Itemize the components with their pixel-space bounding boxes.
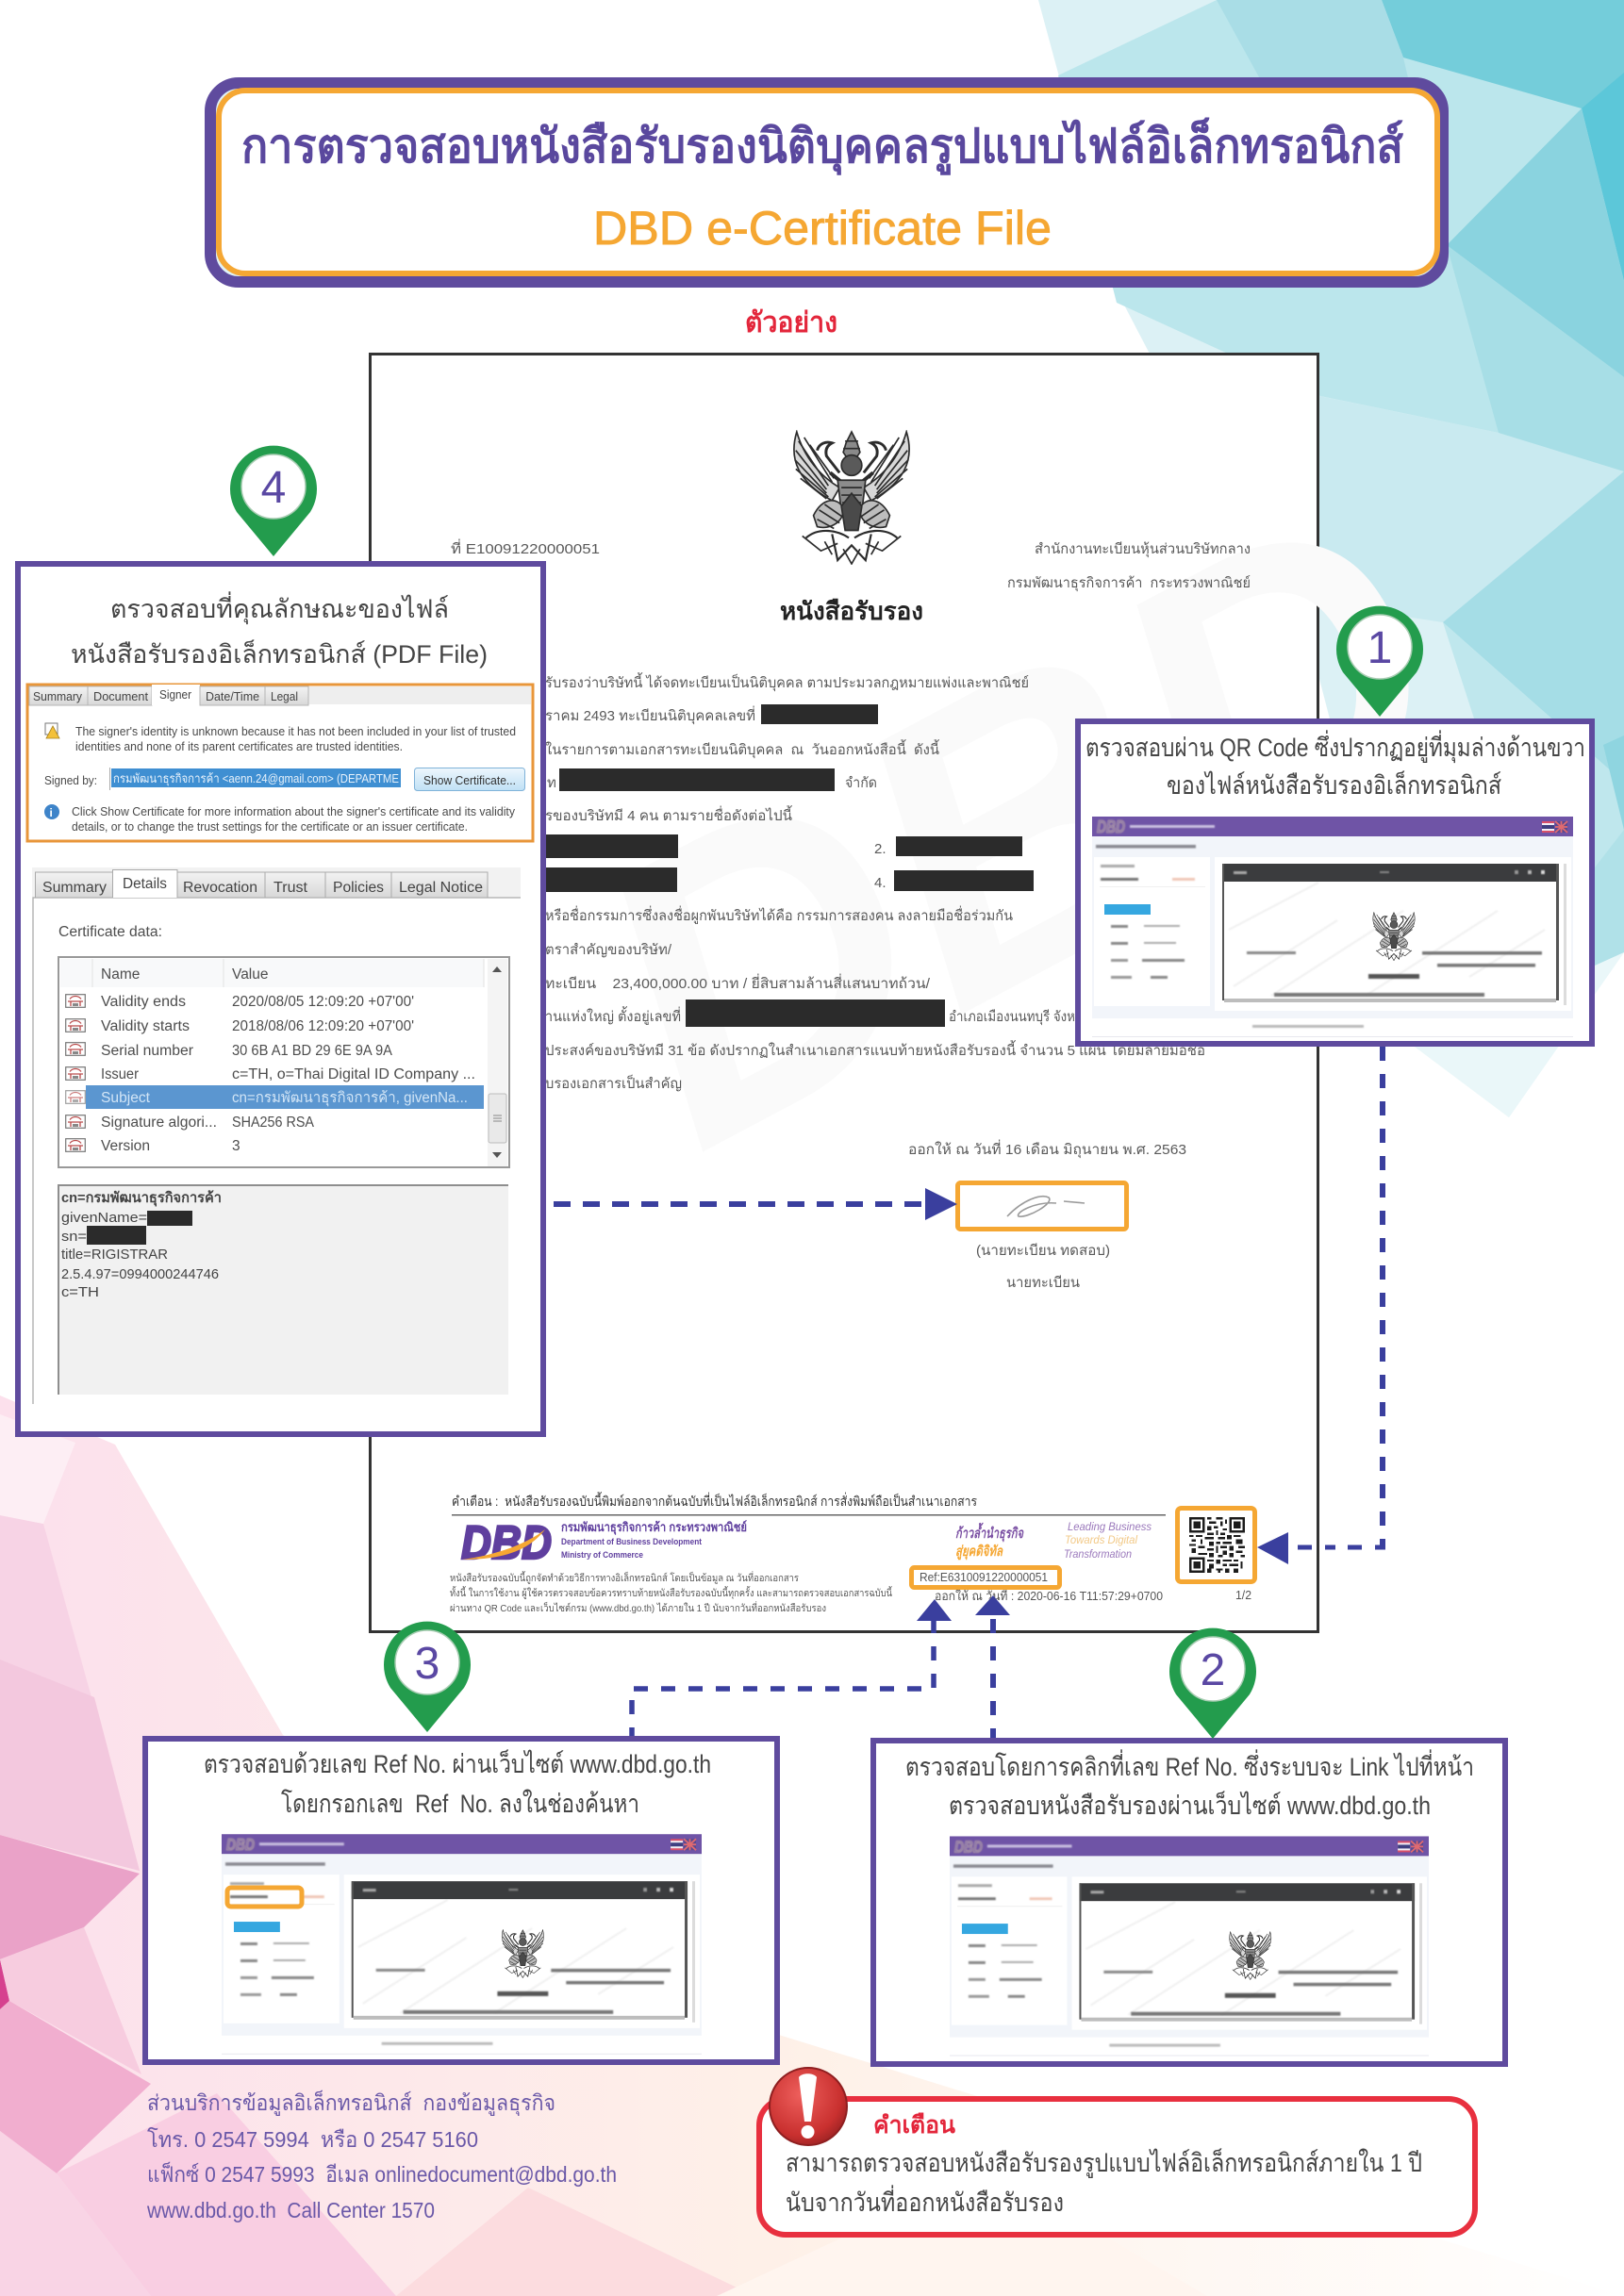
document body text: อำเภอเมืองนนทบุรี จังหวัด bbox=[949, 1009, 1090, 1026]
document body text: รับรองว่าบริษัทนี้ ได้จดทะเบียนเป็นนิติบุคคล ตามประมวลกฎหมายแพ่งและพาณิชย์ bbox=[545, 672, 1029, 692]
certificate field rows: Validity ends bbox=[101, 994, 186, 1010]
website screenshot bbox=[1092, 817, 1573, 1037]
callout: warning box bbox=[759, 2068, 1475, 2235]
document body text: ในรายการตามเอกสารทะเบียนนิติบุคคล ณ วันออกหนังสือนี้ ดังนี้ bbox=[545, 739, 939, 759]
pin 2 bbox=[1169, 1628, 1256, 1739]
warning heading: คำเตือน bbox=[873, 2112, 955, 2139]
slogan: ก้าวล้ำนำธุรกิจ bbox=[955, 1522, 1024, 1543]
panel 4 heading bbox=[71, 591, 488, 669]
panel 3 heading: ตรวจสอบด้วยเลข Ref No. ผ่านเว็บไซต์ www.dbd.go.th bbox=[204, 1747, 711, 1778]
signer dialog highlighted in orange bbox=[27, 685, 533, 841]
DBD logo: DBD bbox=[461, 1516, 552, 1569]
pin 3: 3 bbox=[415, 1639, 439, 1689]
certificate viewer dialog: Certificate data: bbox=[58, 924, 162, 940]
contact information: www.dbd.go.th Call Center 1570 bbox=[146, 2198, 435, 2222]
slogan: Transformation bbox=[1064, 1549, 1132, 1561]
certificate field rows: SHA256 RSA bbox=[232, 1115, 315, 1131]
sample label: ตัวอย่าง bbox=[745, 307, 837, 339]
certificate field rows: 2020/08/05 12:09:20 +07'00' bbox=[232, 994, 414, 1010]
certificate viewer dialog: Revocation bbox=[183, 880, 257, 896]
subject detail text box: c=TH bbox=[61, 1284, 99, 1300]
subject detail text box bbox=[58, 1185, 508, 1395]
signer dialog highlighted in orange: Summary bbox=[33, 689, 82, 703]
document body text: หรือชื่อกรรมการซึ่งลงชื่อผูกพันบริษัทได้คือ กรรมการสองคน ลงลายมือชื่อร่วมกัน bbox=[545, 905, 1013, 924]
pin 4: 4 bbox=[261, 463, 286, 513]
signer dialog highlighted in orange: details, or to change the trust settings for the certificate or an issuer certificate. bbox=[72, 819, 468, 834]
signer dialog highlighted in orange: Click Show Certificate for more information about the signer's certificate and its validity bbox=[72, 804, 515, 818]
issuing office: กรมพัฒนาธุรกิจการค้า กระทรวงพาณิชย์ bbox=[1007, 575, 1251, 592]
pin 1: 1 bbox=[1367, 623, 1392, 673]
department name: Ministry of Commerce bbox=[561, 1550, 643, 1561]
signer dialog highlighted in orange: identities and none of its parent certificates are trusted identities. bbox=[75, 739, 403, 753]
certificate field rows: Serial number bbox=[101, 1043, 193, 1059]
document watermark: DBD bbox=[524, 420, 1513, 1231]
certificate field rows: Validity starts bbox=[101, 1018, 190, 1034]
subtitle: DBD e-Certificate File bbox=[593, 202, 1052, 255]
panel 2 heading: ตรวจสอบโดยการคลิกที่เลข Ref No. ซึ่งระบบจะ Link ไปที่หน้า bbox=[905, 1749, 1474, 1781]
panel 4: check PDF file properties bbox=[18, 564, 543, 1434]
pin 1 bbox=[1336, 606, 1423, 717]
issue timestamp: ออกให้ ณ วันที่ : 2020-06-16 T11:57:29+0700 bbox=[935, 1588, 1163, 1603]
document body text: ตราสำคัญของบริษัท/ bbox=[545, 942, 672, 958]
department name: กรมพัฒนาธุรกิจการค้า กระทรวงพาณิชย์ bbox=[561, 1520, 747, 1535]
document body text: จำกัด bbox=[845, 775, 877, 791]
page number: 1/2 bbox=[1235, 1588, 1251, 1602]
certificate viewer dialog: Name bbox=[101, 966, 140, 983]
document body text: านแห่งใหญ่ ตั้งอยู่เลขที่ bbox=[545, 1006, 681, 1025]
scrollbar bbox=[488, 959, 507, 1166]
QR code box bbox=[1177, 1509, 1254, 1582]
title banner bbox=[210, 83, 1443, 282]
document body text: ทะเบียน 23,400,000.00 บาท / ยี่สิบสามล้านสี่แสนบาทถ้วน/ bbox=[545, 973, 931, 992]
certificate viewer dialog: Trust bbox=[273, 880, 308, 896]
disclaimer text: ผ่านทาง QR Code และเว็บไซต์กรม (www.dbd.go.th) ได้ภายใน 1 ปี นับจากวันที่ออกหนังสือรับรอง bbox=[450, 1601, 826, 1614]
document body text bbox=[545, 672, 1205, 1092]
certificate viewer dialog: Details bbox=[123, 876, 167, 892]
panel: sample certificate document bbox=[370, 355, 1513, 1631]
panel 3: check Ref No. on website bbox=[145, 1739, 777, 2062]
panel 2 heading bbox=[905, 1749, 1474, 1820]
certificate field rows: 30 6B A1 BD 29 6E 9A 9A bbox=[232, 1043, 393, 1059]
document footer: warning line: คำเตือน : หนังสือรับรองฉบับนี้พิมพ์ออกจากต้นฉบับที่เป็นไฟล์อิเล็กทรอนิกส์ การสั่งพิมพ์ถือเป็นสำเนาเอกสาร bbox=[452, 1492, 977, 1509]
pin 2: 2 bbox=[1201, 1645, 1225, 1695]
disclaimer text: ทั้งนี้ ในการใช้งาน ผู้ใช้ควรตรวจสอบข้อควรทราบท้ายหนังสือรับรองฉบับนี้ทุกครั้ง และสามารถตรวจสอบเอกสารฉบับนี้ bbox=[450, 1586, 893, 1599]
department name: Department of Business Development bbox=[561, 1537, 703, 1547]
pin 3 bbox=[384, 1622, 471, 1732]
document body text: บรองเอกสารเป็นสำคัญ bbox=[545, 1074, 682, 1092]
panel 2: click Ref No. link bbox=[873, 1741, 1505, 2064]
certificate field rows: Issuer bbox=[101, 1066, 139, 1082]
arrow: panel 3 to ref number bbox=[632, 1599, 952, 1736]
signer dialog highlighted in orange: Signed by: bbox=[44, 773, 97, 787]
icon: red exclamation ball bbox=[770, 2068, 847, 2145]
certificate viewer dialog bbox=[32, 867, 521, 1404]
registrar name bbox=[976, 1243, 1110, 1291]
department name bbox=[561, 1520, 747, 1561]
disclaimer text: หนังสือรับรองฉบับนี้ถูกจัดทำด้วยวิธีการทางอิเล็กทรอนิกส์ โดยเป็นข้อมูล ณ วันที่ออกเอกสาร bbox=[450, 1571, 799, 1584]
certificate field rows: c=TH, o=Thai Digital ID Company ... bbox=[232, 1066, 475, 1082]
disclaimer text bbox=[450, 1571, 893, 1614]
pin 4 bbox=[230, 446, 317, 556]
panel 3 heading: โดยกรอกเลข Ref No. ลงในช่องค้นหา bbox=[281, 1789, 639, 1818]
signer dialog highlighted in orange: Legal bbox=[271, 689, 298, 703]
document body text: 4. bbox=[874, 875, 887, 891]
certificate viewer dialog: Legal Notice bbox=[399, 880, 483, 896]
registrar name: (นายทะเบียน ทดสอบ) bbox=[976, 1243, 1110, 1259]
certificate field rows: cn=กรมพัฒนาธุรกิจการค้า, givenNa... bbox=[232, 1090, 468, 1107]
document number: ที่ E10091220000051 bbox=[451, 538, 600, 557]
slogan bbox=[955, 1522, 1152, 1561]
subject detail text box: sn= bbox=[61, 1229, 87, 1245]
certificate field rows bbox=[66, 994, 484, 1154]
registrar name: นายทะเบียน bbox=[1006, 1275, 1080, 1291]
panel 3 heading bbox=[204, 1747, 711, 1818]
issuing office bbox=[1007, 541, 1251, 592]
document body text: ประสงค์ของบริษัทมี 31 ข้อ ดังปรากฏในสำเนาเอกสารแนบท้ายหนังสือรับรองนี้ จำนวน 5 แผ่น โดยมีลายมือชื่อ bbox=[545, 1040, 1205, 1059]
panel 1: check via QR code bbox=[1078, 721, 1592, 1044]
certificate viewer dialog: Policies bbox=[333, 880, 384, 896]
panel 4 heading: หนังสือรับรองอิเล็กทรอนิกส์ (PDF File) bbox=[71, 637, 488, 669]
certificate field rows: 3 bbox=[232, 1138, 240, 1154]
arrow: panel 2 to ref number bbox=[975, 1595, 1010, 1741]
document heading: หนังสือรับรอง bbox=[780, 597, 923, 625]
search field highlight bbox=[227, 1888, 302, 1907]
signer dialog highlighted in orange: Show Certificate... bbox=[423, 773, 516, 787]
document body text: 2. bbox=[874, 841, 887, 857]
document body text: รของบริษัทมี 4 คน ตามรายชื่อดังต่อไปนี้ bbox=[545, 805, 792, 824]
signature box bbox=[958, 1182, 1126, 1230]
document body text: ท bbox=[547, 775, 556, 791]
icon: info bbox=[44, 804, 59, 819]
contact information bbox=[146, 2089, 617, 2222]
certificate viewer dialog: Summary bbox=[42, 880, 107, 896]
icon: Garuda emblem bbox=[794, 432, 909, 564]
slogan: Leading Business bbox=[1068, 1522, 1152, 1533]
certificate field rows: Version bbox=[101, 1138, 150, 1154]
slogan: สู่ยุคดิจิทัล bbox=[955, 1544, 1003, 1561]
signer dialog highlighted in orange: Document bbox=[93, 689, 148, 703]
signer dialog highlighted in orange: กรมพัฒนาธุรกิจการค้า <aenn.24@gmail.com> (DEPARTME bbox=[113, 771, 399, 786]
panel 1 heading bbox=[1085, 730, 1585, 800]
certificate field rows: 2018/08/06 12:09:20 +07'00' bbox=[232, 1018, 414, 1034]
subject detail text box: title=RIGISTRAR bbox=[61, 1247, 168, 1263]
panel 2 heading: ตรวจสอบหนังสือรับรองผ่านเว็บไซต์ www.dbd.go.th bbox=[949, 1789, 1431, 1820]
signer dialog highlighted in orange: Signer bbox=[159, 687, 192, 702]
signer dialog highlighted in orange: The signer's identity is unknown because it has not been included in your list of trusted bbox=[75, 724, 516, 738]
panel 4 heading: ตรวจสอบที่คุณลักษณะของไฟล์ bbox=[110, 591, 449, 625]
panel 1 heading: ของไฟล์หนังสือรับรองอิเล็กทรอนิกส์ bbox=[1167, 768, 1501, 800]
subject detail text box: givenName= bbox=[61, 1210, 147, 1226]
title: Thai heading: การตรวจสอบหนังสือรับรองนิติบุคคลรูปแบบไฟล์อิเล็กทรอนิกส์ bbox=[241, 117, 1403, 175]
subject detail text box: cn=กรมพัฒนาธุรกิจการค้า bbox=[61, 1189, 222, 1207]
website screenshot bbox=[222, 1834, 702, 2055]
subject detail text box: 2.5.4.97=0994000244746 bbox=[61, 1266, 219, 1282]
issue date: ออกให้ ณ วันที่ 16 เดือน มิถุนายน พ.ศ. 2563 bbox=[908, 1139, 1186, 1159]
website screenshot bbox=[950, 1836, 1429, 2056]
signer dialog highlighted in orange: Date/Time bbox=[206, 689, 259, 703]
document body text: ราคม 2493 ทะเบียนนิติบุคคลเลขที่ bbox=[545, 705, 755, 725]
arrow: panel 1 to QR code bbox=[1257, 1047, 1385, 1564]
contact information: แฟ็กซ์ 0 2547 5993 อีเมล onlinedocument@dbd.go.th bbox=[147, 2160, 617, 2187]
certificate viewer dialog: Value bbox=[232, 966, 268, 983]
issuing office: สำนักงานทะเบียนหุ้นส่วนบริษัทกลาง bbox=[1035, 541, 1251, 558]
slogan: Towards Digital bbox=[1065, 1535, 1137, 1546]
certificate field rows: Signature algori... bbox=[101, 1115, 217, 1131]
icon: warning bbox=[45, 723, 59, 738]
arrow: panel 4 to signature bbox=[554, 1188, 957, 1220]
ref number box: Ref:E6310091220000051 bbox=[920, 1570, 1048, 1584]
ref number box bbox=[911, 1567, 1060, 1588]
contact information: ส่วนบริการข้อมูลอิเล็กทรอนิกส์ กองข้อมูลธุรกิจ bbox=[147, 2089, 555, 2116]
warning text: นับจากวันที่ออกหนังสือรับรอง bbox=[786, 2185, 1064, 2217]
warning text: สามารถตรวจสอบหนังสือรับรองรูปแบบไฟล์อิเล็กทรอนิกส์ภายใน 1 ปี bbox=[786, 2146, 1422, 2178]
icon: info: i bbox=[49, 806, 53, 819]
certificate field rows: Subject bbox=[101, 1090, 151, 1106]
contact information: โทร. 0 2547 5994 หรือ 0 2547 5160 bbox=[147, 2127, 478, 2152]
warning text bbox=[786, 2146, 1422, 2217]
